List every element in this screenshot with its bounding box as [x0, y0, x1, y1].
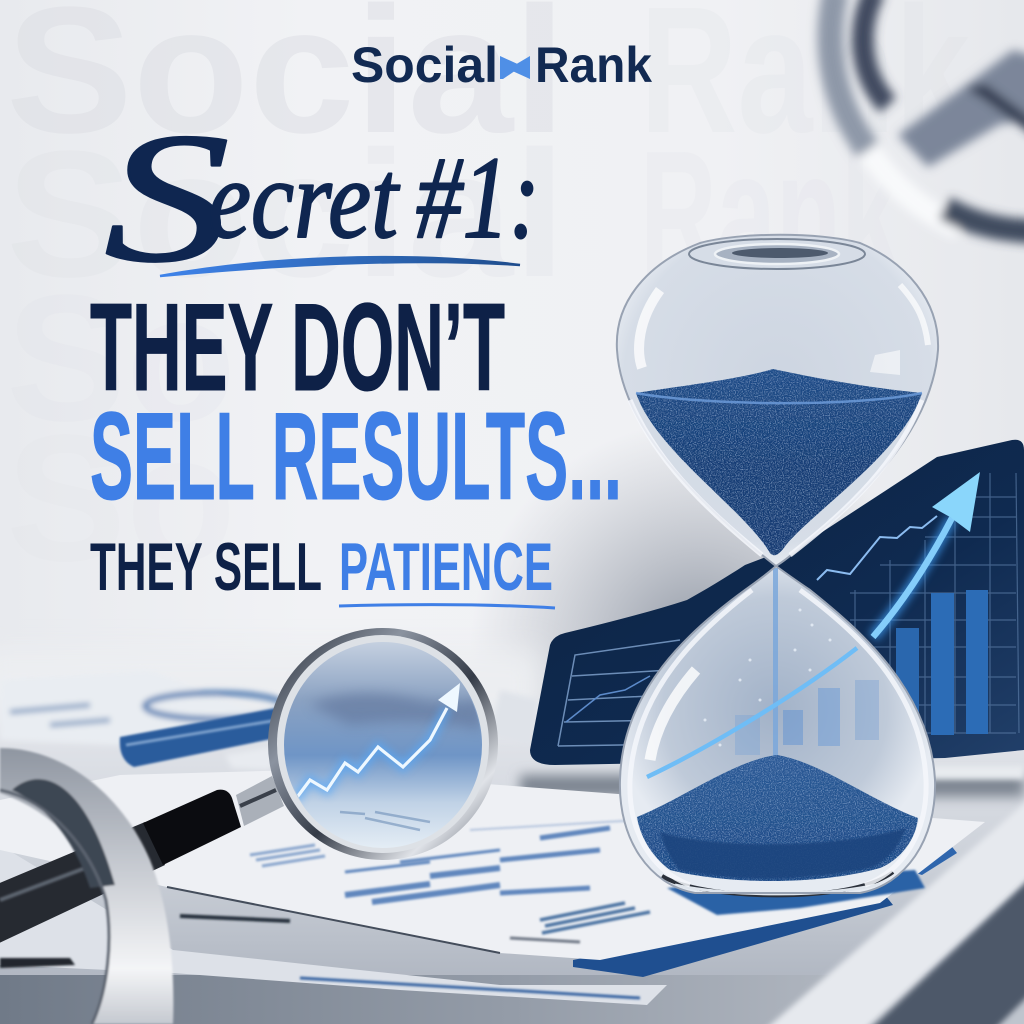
- glass outline: [617, 235, 938, 893]
- glass base: [662, 872, 893, 895]
- left chart: [558, 640, 680, 746]
- heading: Secret #1: #1:: [416, 132, 540, 263]
- watermark brand lettering: So: [6, 258, 236, 459]
- blue papers right: [900, 838, 957, 875]
- handle shaft: [0, 822, 165, 945]
- brush underline: [160, 257, 520, 276]
- magnifying glass: [0, 628, 498, 945]
- sheet bar marks: [250, 820, 650, 933]
- blurred chrome ring top right: [830, 0, 1024, 232]
- sparkle dust in glass: [704, 608, 832, 746]
- subheading: they sell patience: PATIENCE: [339, 529, 553, 605]
- highlights: [639, 290, 660, 368]
- rising arrow: [647, 648, 857, 777]
- blurred chrome ring bottom left: [0, 748, 173, 1024]
- icon: logo mark: [500, 56, 530, 79]
- lower sheet: [0, 845, 667, 1005]
- logo: Rank: [535, 37, 652, 93]
- heading: Secret #1: ecret: [208, 138, 400, 262]
- heading: Secret #1: S: [104, 95, 230, 301]
- desk: [0, 650, 1024, 1024]
- blurred papers and pen on desk: [0, 670, 540, 770]
- logo: [351, 37, 652, 93]
- main sheet: [0, 770, 985, 960]
- lower bulb glass: [620, 566, 935, 893]
- blue pen: [120, 708, 281, 767]
- right grid: [850, 473, 1019, 733]
- hourglass: [617, 235, 980, 895]
- lens glass: [284, 642, 482, 848]
- falling sand: [773, 568, 778, 758]
- bars: [896, 628, 919, 734]
- handle collar: [236, 776, 284, 826]
- blue spine: [573, 895, 893, 977]
- hourglass shadow: [667, 870, 925, 915]
- top sand: [636, 369, 922, 555]
- watermark brand lettering: Social: [6, 114, 566, 315]
- watermark brand lettering: [6, 0, 971, 599]
- glass rim: [689, 239, 865, 269]
- upper bulb glass: [617, 235, 938, 566]
- headline: they don't: THEY DON’T: [90, 279, 505, 417]
- bottom sand: [637, 755, 918, 881]
- heading: Secret #1: [104, 95, 540, 301]
- thin line chart: [817, 516, 937, 580]
- ghost bars in glass: [783, 710, 803, 745]
- patience underline: [339, 605, 555, 608]
- chart screen behind hourglass: [530, 440, 1024, 765]
- handle grip: [143, 790, 241, 865]
- paper documents: [0, 770, 985, 1005]
- logo: Social: [351, 37, 498, 93]
- subheading: they sell patience: THEY SELL: [90, 529, 322, 605]
- watermark brand lettering: So: [6, 398, 236, 599]
- lens frame: [268, 628, 498, 860]
